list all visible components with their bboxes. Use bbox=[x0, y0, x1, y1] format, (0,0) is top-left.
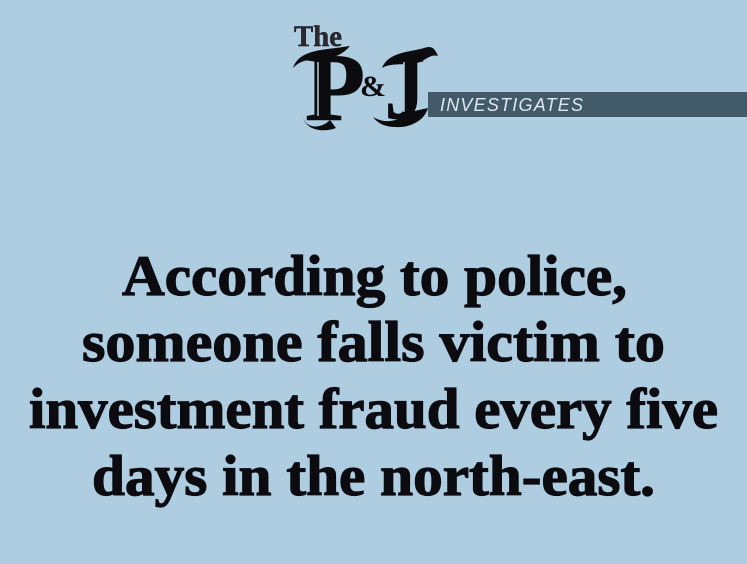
logo: The P&J: & bbox=[360, 70, 386, 103]
logo: The P&J: P bbox=[305, 34, 365, 141]
logo: The P&J: J bbox=[385, 36, 425, 138]
headline: someone falls victim to bbox=[82, 311, 665, 374]
headline: According to police, bbox=[122, 245, 627, 308]
logo: The P&J: The bbox=[294, 20, 342, 53]
banner: investigates: INVESTIGATES bbox=[440, 95, 583, 115]
banner: investigates bbox=[428, 92, 747, 117]
headline: investment fraud every five bbox=[29, 378, 718, 441]
headline: days in the north-east. bbox=[92, 445, 655, 508]
headline bbox=[29, 245, 718, 508]
logo: The P&J bbox=[293, 20, 438, 141]
